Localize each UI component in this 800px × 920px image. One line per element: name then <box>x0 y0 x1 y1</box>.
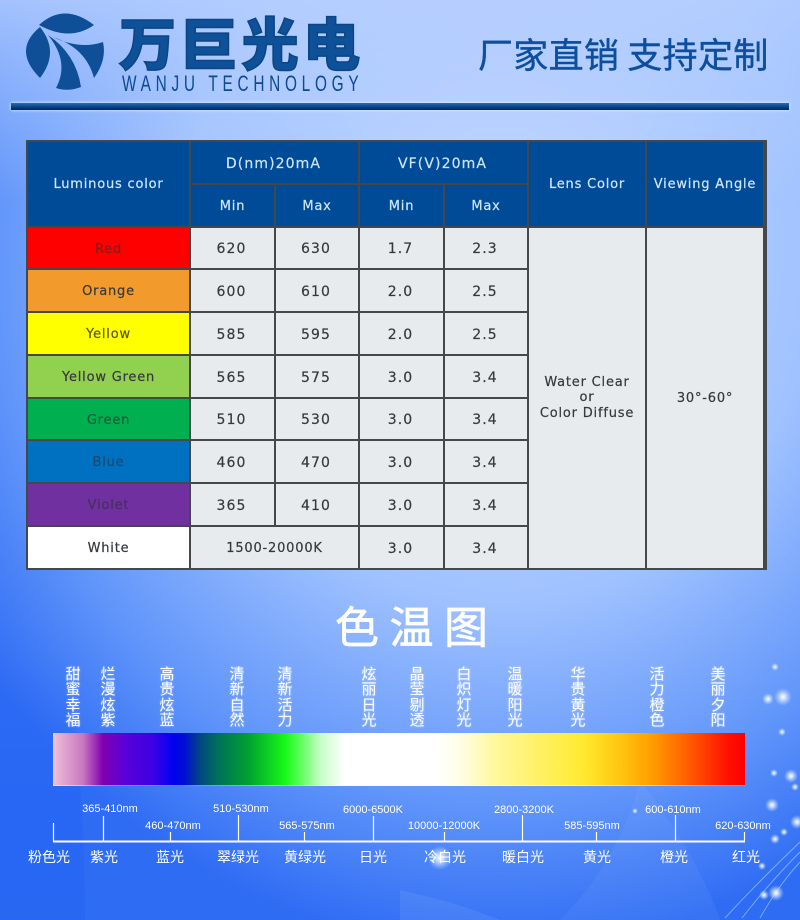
light color names: 冷白光 <box>424 847 466 867</box>
spec table: 595 <box>301 326 331 342</box>
spec table: 2.3 <box>472 241 498 257</box>
vertical descriptors: 炫 <box>361 663 376 684</box>
vertical descriptors: 白 <box>456 663 472 684</box>
spec table: Red <box>95 242 122 256</box>
vertical descriptors: 美 <box>710 663 726 684</box>
spec table: 620 <box>216 241 247 257</box>
vertical descriptors: 力 <box>277 709 292 730</box>
heading: color temperature chart: 色温图 <box>335 592 498 656</box>
wavelength labels <box>82 803 771 832</box>
vertical descriptors: 夕 <box>710 694 726 715</box>
spec table: 3.0 <box>388 454 413 470</box>
vertical descriptors: 华 <box>570 663 586 684</box>
spec table: 410 <box>301 498 331 514</box>
light color names: 蓝光 <box>156 847 184 867</box>
spec table: 460 <box>216 454 247 470</box>
vertical descriptors: 丽 <box>710 678 726 699</box>
vertical descriptors: 光 <box>507 709 522 730</box>
spec table: 1500-20000K <box>226 541 323 556</box>
color temperature gradient bar <box>53 733 745 786</box>
slogan: 厂家直销 支持定制 <box>478 28 769 79</box>
spec table: 2.0 <box>388 284 413 300</box>
vertical descriptors: 甜 <box>65 663 80 684</box>
light color names: 橙光 <box>660 847 688 867</box>
vertical descriptors: 活 <box>649 663 664 684</box>
vertical descriptors: 新 <box>229 678 244 699</box>
vertical descriptors: 光 <box>361 709 376 730</box>
spec table: 630 <box>301 241 331 257</box>
spec table <box>26 140 767 570</box>
vertical descriptors: 幸 <box>65 694 80 715</box>
light color names: 紫光 <box>90 847 118 867</box>
vertical descriptors: 色 <box>649 709 664 730</box>
wavelength labels: 6000-6500K <box>343 804 403 816</box>
spec table: 3.0 <box>388 370 413 386</box>
vertical descriptors: 阳 <box>507 694 522 715</box>
header divider <box>11 103 789 110</box>
icon: logo mark <box>26 14 104 90</box>
vertical descriptors: 力 <box>649 678 664 699</box>
vertical descriptors: 活 <box>277 694 292 715</box>
light color names: 黄绿光 <box>284 847 326 867</box>
spec table: 530 <box>301 412 331 428</box>
wavelength labels: 2800-3200K <box>494 804 554 816</box>
vertical descriptors: 漫 <box>100 678 116 699</box>
light color names <box>28 847 760 867</box>
logo name: 万巨光电 <box>119 0 360 82</box>
spec table: D(nm)20mA <box>226 156 321 172</box>
vertical descriptors: 温 <box>507 663 522 684</box>
spec table: 470 <box>301 454 331 470</box>
vertical descriptors: 丽 <box>361 678 376 699</box>
spec table: Luminous color <box>53 176 164 192</box>
light color names: 黄光 <box>583 847 611 867</box>
vertical descriptors: 然 <box>229 709 244 730</box>
spec table: 2.5 <box>472 326 498 342</box>
spec table: or <box>580 390 594 405</box>
wavelength labels: 10000-12000K <box>408 820 480 832</box>
spec table: 610 <box>301 284 331 300</box>
vertical descriptors: 莹 <box>409 678 424 699</box>
vertical descriptors: 清 <box>229 663 244 684</box>
wavelength labels: 510-530nm <box>213 803 269 815</box>
wavelength labels: 460-470nm <box>145 820 201 832</box>
vertical descriptors: 日 <box>361 694 376 715</box>
spec table: 2.5 <box>472 284 498 300</box>
vertical descriptors: 暖 <box>507 678 522 699</box>
spec table: 2.0 <box>388 326 413 342</box>
spec table: Min <box>389 199 414 214</box>
spec table: Color Diffuse <box>540 406 634 421</box>
spec table: Blue <box>93 455 124 470</box>
wavelength labels: 585-595nm <box>564 820 620 832</box>
spec table: Yellow <box>86 327 131 342</box>
spec table: 3.0 <box>388 412 413 428</box>
vertical descriptors: 蓝 <box>159 709 174 730</box>
logo <box>26 0 360 97</box>
vertical descriptors: 新 <box>277 678 292 699</box>
vertical descriptors: 福 <box>65 709 80 730</box>
spec table: 3.4 <box>472 498 498 514</box>
spec table: 3.4 <box>472 412 498 428</box>
light color names: 红光 <box>732 847 760 867</box>
vertical descriptors: 剔 <box>409 694 424 715</box>
vertical descriptors: 晶 <box>409 663 424 684</box>
vertical descriptors: 清 <box>277 663 292 684</box>
wavelength labels: 620-630nm <box>715 820 771 832</box>
vertical descriptors: 蜜 <box>65 678 80 699</box>
spec table: Viewing Angle <box>654 176 756 192</box>
wavelength labels: 365-410nm <box>82 803 138 815</box>
spec table: 3.0 <box>388 498 413 514</box>
spec table: Green <box>87 412 130 428</box>
spec table: 600 <box>216 284 247 300</box>
vertical descriptors: 炽 <box>456 678 472 699</box>
light color names: 粉色光 <box>28 847 70 867</box>
vertical descriptors: 烂 <box>100 663 116 684</box>
light color names: 翠绿光 <box>217 847 259 867</box>
vertical descriptors: 贵 <box>159 678 174 699</box>
spec table: 30°-60° <box>677 390 733 406</box>
spec table: Water Clear <box>544 375 630 390</box>
spec table: Lens Color <box>549 176 625 192</box>
spec table: Max <box>302 199 332 214</box>
spec table: 3.4 <box>472 454 498 470</box>
spec table: 575 <box>301 370 331 386</box>
spec table: 585 <box>216 326 247 342</box>
light color names: 暖白光 <box>502 847 544 867</box>
spec table: 1.7 <box>388 241 413 257</box>
vertical descriptors: 透 <box>409 709 424 730</box>
spec table: VF(V)20mA <box>398 156 487 172</box>
vertical descriptors: 自 <box>229 694 244 715</box>
vertical descriptors <box>65 663 726 730</box>
vertical descriptors: 橙 <box>649 694 664 715</box>
spec table: 3.0 <box>388 540 413 556</box>
vertical descriptors: 炫 <box>100 694 116 715</box>
spec table: 565 <box>216 370 247 386</box>
spec table: 365 <box>216 498 247 514</box>
vertical descriptors: 光 <box>570 709 586 730</box>
spec table: 3.4 <box>472 370 498 386</box>
spec table: White <box>88 541 129 556</box>
spec table: 3.4 <box>472 540 498 556</box>
spec table: Min <box>220 199 245 214</box>
logo tagline: WANJU TECHNOLOGY <box>122 72 359 97</box>
vertical descriptors: 灯 <box>456 694 472 715</box>
spec table: Yellow Green <box>62 370 155 385</box>
vertical descriptors: 贵 <box>570 678 586 699</box>
vertical descriptors: 高 <box>159 663 174 684</box>
vertical descriptors: 阳 <box>710 709 726 730</box>
vertical descriptors: 炫 <box>159 694 174 715</box>
wavelength labels: 565-575nm <box>279 820 335 832</box>
spec table: 510 <box>216 412 247 428</box>
spec table: Orange <box>82 284 135 299</box>
vertical descriptors: 紫 <box>100 709 116 730</box>
light color names: 日光 <box>359 847 387 867</box>
vertical descriptors: 光 <box>456 709 472 730</box>
wavelength labels: 600-610nm <box>645 804 701 816</box>
vertical descriptors: 黄 <box>570 694 586 715</box>
spec table: Violet <box>88 498 129 513</box>
spec table: Max <box>471 199 501 214</box>
